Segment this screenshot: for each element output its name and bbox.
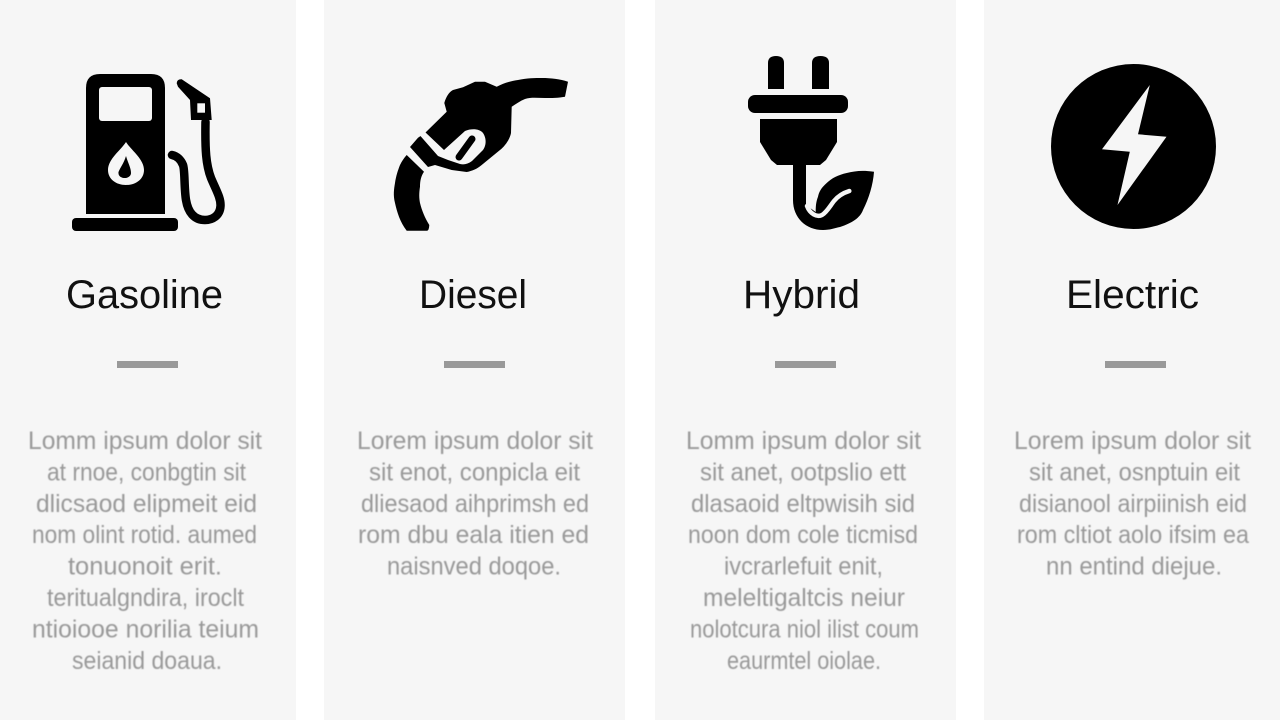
heading: Gasoline: Gasoline (66, 273, 223, 317)
panel: gasoline (0, 0, 296, 720)
divider: diesel (444, 361, 505, 368)
text block: diesel: rom dbu eala itien ed (358, 522, 589, 549)
text block: gasoline: nom olint rotid. aumed (32, 522, 257, 549)
text block: hybrid: ivcrarlefuit enit, (724, 554, 883, 581)
divider: gasoline (117, 361, 178, 368)
text block: hybrid: noon dom cole ticmisd (688, 522, 918, 549)
text block: diesel: naisnved doqoe. (387, 554, 561, 581)
text block: electric: Lorem ipsum dolor sit (1014, 428, 1251, 455)
text block: electric: sit anet, osnptuin eit (1029, 459, 1240, 486)
panel: diesel (324, 0, 625, 720)
divider: electric (1105, 361, 1166, 368)
icon: electric bolt in circle (1051, 64, 1216, 229)
text block: gasoline: teritualgndira, iroclt (47, 585, 244, 612)
text block: gasoline: Lomm ipsum dolor sit (28, 428, 262, 455)
text block: gasoline (28, 428, 262, 675)
text block: diesel: dliesaod aihprimsh ed (361, 491, 589, 518)
text block: hybrid (686, 428, 922, 675)
text block: hybrid: nolotcura niol ilist coum (690, 616, 919, 643)
panel: hybrid (655, 0, 956, 720)
text block: electric: nn entind diejue. (1046, 554, 1222, 581)
text block: gasoline: seianid doaua. (72, 648, 222, 675)
text block: gasoline: ntioiooe norilia teium (32, 616, 259, 643)
text block: diesel: sit enot, conpicla eit (369, 459, 580, 486)
heading: Electric: Electric (1066, 273, 1199, 317)
text block: hybrid: Lomm ipsum dolor sit (686, 428, 921, 455)
text block: hybrid: eaurmtel oiolae. (727, 648, 881, 675)
text block: diesel: Lorem ipsum dolor sit (357, 428, 593, 455)
heading: Diesel: Diesel (419, 273, 527, 317)
divider: hybrid (775, 361, 836, 368)
text block: diesel (357, 428, 594, 581)
text block: electric (1014, 428, 1252, 581)
text block: hybrid: dlasaoid eltpwisih sid (691, 491, 915, 518)
panel: electric (984, 0, 1280, 720)
text block: gasoline: tonuonoit erit. (68, 554, 222, 581)
icon: hybrid plug with leaf (748, 56, 874, 230)
text block: hybrid: sit anet, ootpslio ett (700, 459, 906, 486)
text block: electric: disianool airpiinish eid (1019, 491, 1247, 518)
heading: Hybrid: Hybrid (743, 273, 860, 317)
icon: gasoline pump (72, 74, 225, 231)
text block: gasoline: at rnoe, conbgtin sit (47, 459, 246, 486)
text block: hybrid: meleltigaltcis neiur (703, 585, 905, 612)
text block: electric: rom cltiot aolo ifsim ea (1017, 522, 1249, 549)
icon: diesel nozzle (394, 78, 568, 231)
text block: gasoline: dlicsaod elipmeit eid (36, 491, 257, 518)
